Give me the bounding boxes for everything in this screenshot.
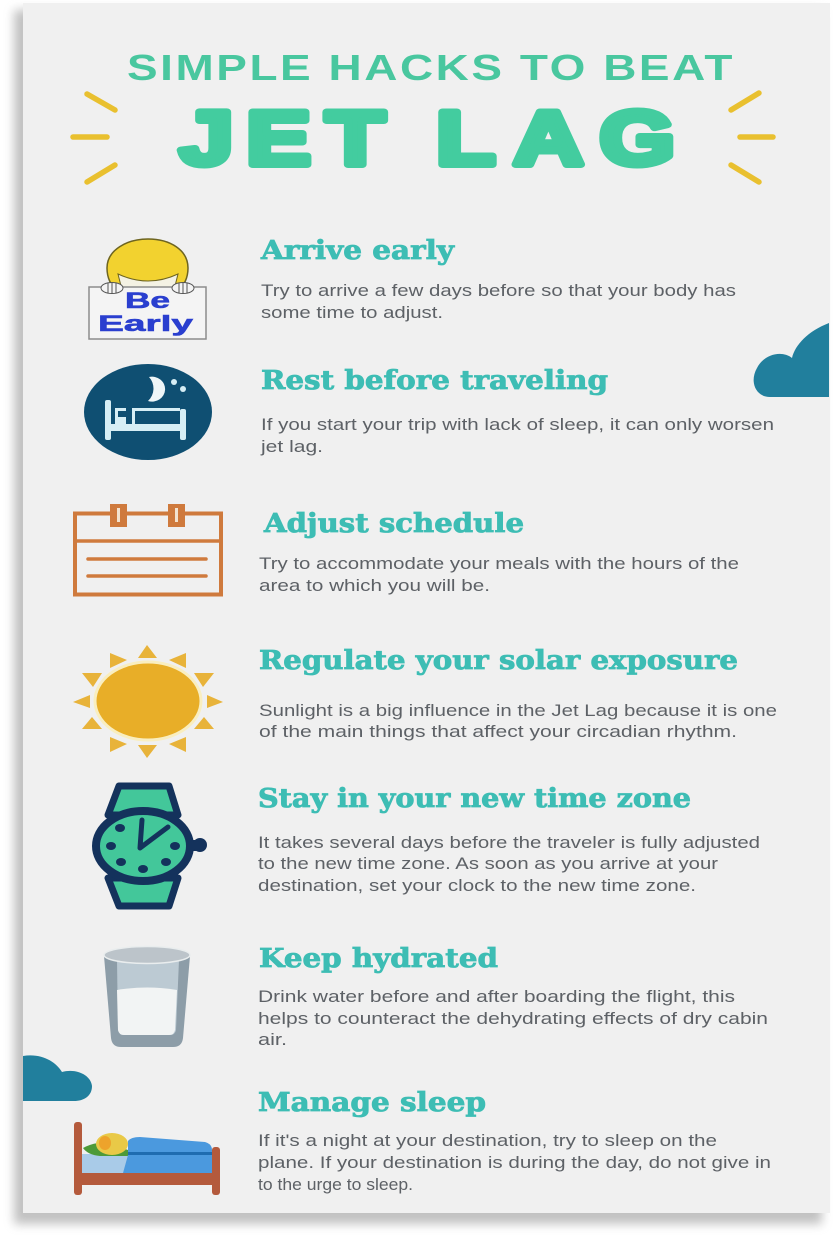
icon: cloud left [23,1055,92,1101]
text: keep hydrated: Drink water before and after boarding the flight, this [258,987,735,1006]
text: adjust schedule: Try to accommodate your meals with the hours of the [259,554,739,573]
icon: cloud right [754,323,829,397]
text: rest before traveling [260,415,774,456]
icon: glass of water [104,946,190,1047]
icon: wristwatch [96,786,207,906]
text: regulate solar exposure [259,701,777,741]
text: stay in new time zone: It takes several days before the traveler is fully adjusted [258,833,760,852]
text: arrive early: Try to arrive a few days before so that your body has [261,281,736,300]
heading: regulate solar exposure: Regulate your solar exposure [259,646,738,676]
title [127,47,735,181]
text: regulate solar exposure: of the main things that affect your circadian rhythm. [259,722,737,741]
heading: arrive early: Arrive early [260,236,455,266]
text: regulate solar exposure: Sunlight is a big influence in the Jet Lag because it is one [259,701,777,720]
text: adjust schedule: area to which you will be. [259,576,490,595]
icon: person in bed [74,1122,220,1195]
text: arrive early: some time to adjust. [261,303,443,322]
icon: bed at night [84,364,212,460]
heading: rest before traveling: Rest before traveling [261,366,608,396]
text: keep hydrated: helps to counteract the dehydrating effects of dry cabin [258,1009,768,1028]
icon: sun [73,645,223,758]
text: manage sleep: plane. If your destination is during the day, do not give in [258,1153,771,1172]
text: rest before traveling: jet lag. [260,437,323,456]
icon: left yellow rays [73,94,115,182]
text: manage sleep: If it's a night at your destination, try to sleep on the [258,1131,717,1150]
icon: be early sign: Be [125,288,170,313]
text: rest before traveling: If you start your trip with lack of sleep, it can only worsen [261,415,774,434]
icon: be early sign: Early [98,311,194,336]
title line: jet lag: JET LAG [180,96,675,181]
text: arrive early [261,281,736,322]
text: stay in new time zone [258,833,760,895]
text: keep hydrated: air. [258,1030,287,1049]
heading: adjust schedule: Adjust schedule [263,509,524,539]
heading: stay in new time zone: Stay in your new time zone [258,784,691,814]
text: stay in new time zone: to the new time zone. As soon as you arrive at your [258,854,718,873]
text: manage sleep: to the urge to sleep. [258,1175,413,1194]
text: adjust schedule [259,554,739,595]
text: keep hydrated [258,987,768,1049]
title line: simple hacks: SIMPLE HACKS TO BEAT [127,47,735,88]
icon: be early sign [89,239,206,339]
text: manage sleep [258,1131,771,1194]
icon: right yellow rays [731,93,773,182]
heading: manage sleep: Manage sleep [258,1088,486,1118]
icon: calendar [75,504,221,594]
heading: keep hydrated: Keep hydrated [259,944,498,974]
text: stay in new time zone: destination, set your clock to the new time zone. [258,876,696,895]
